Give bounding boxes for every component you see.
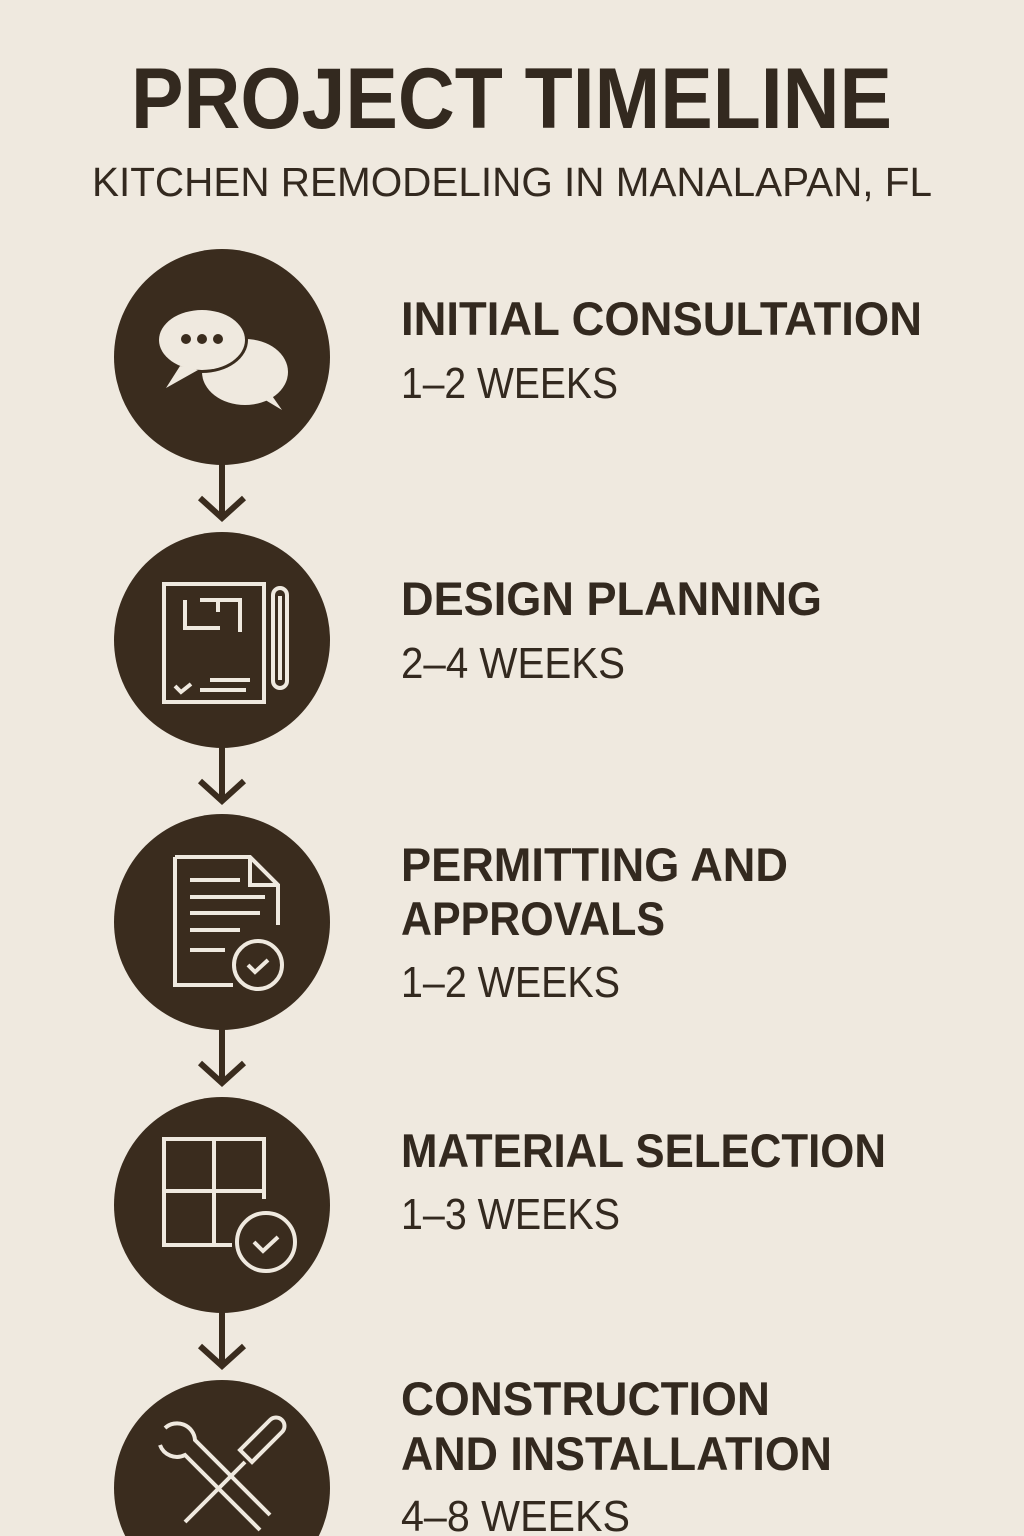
- icon: blueprint and pencil: [114, 532, 330, 748]
- step 2: design planning: [114, 532, 822, 748]
- heading: DESIGN PLANNING: [401, 572, 822, 625]
- heading: INITIAL CONSULTATION: [401, 292, 922, 345]
- heading: PERMITTING AND: [401, 838, 788, 891]
- arrow 3: [200, 1027, 244, 1083]
- heading: MATERIAL SELECTION: [401, 1124, 886, 1177]
- arrow 2: [200, 745, 244, 801]
- icon: chat bubbles: [114, 249, 330, 465]
- duration: 1–3 WEEKS: [401, 1190, 620, 1239]
- step 4: material selection: [114, 1097, 886, 1313]
- duration: 2–4 WEEKS: [401, 639, 625, 688]
- heading: CONSTRUCTION: [401, 1372, 770, 1425]
- icon: tiles with check: [114, 1097, 330, 1313]
- arrow 4: [200, 1310, 244, 1366]
- icon: document with check: [114, 814, 330, 1030]
- arrow 1: [200, 462, 244, 518]
- title: PROJECT TIMELINE: [131, 51, 892, 147]
- duration: 1–2 WEEKS: [401, 359, 618, 408]
- duration: 1–2 WEEKS: [401, 958, 620, 1007]
- step 5: construction: AND INSTALLATION: [401, 1427, 832, 1480]
- subtitle: KITCHEN REMODELING IN MANALAPAN, FL: [92, 159, 932, 205]
- step 3: permitting: APPROVALS: [401, 892, 665, 945]
- step 5: construction: [114, 1372, 832, 1536]
- step 3: permitting: [114, 814, 788, 1030]
- icon: wrench and screwdriver: [114, 1380, 330, 1536]
- step 1: initial consultation: [114, 249, 922, 465]
